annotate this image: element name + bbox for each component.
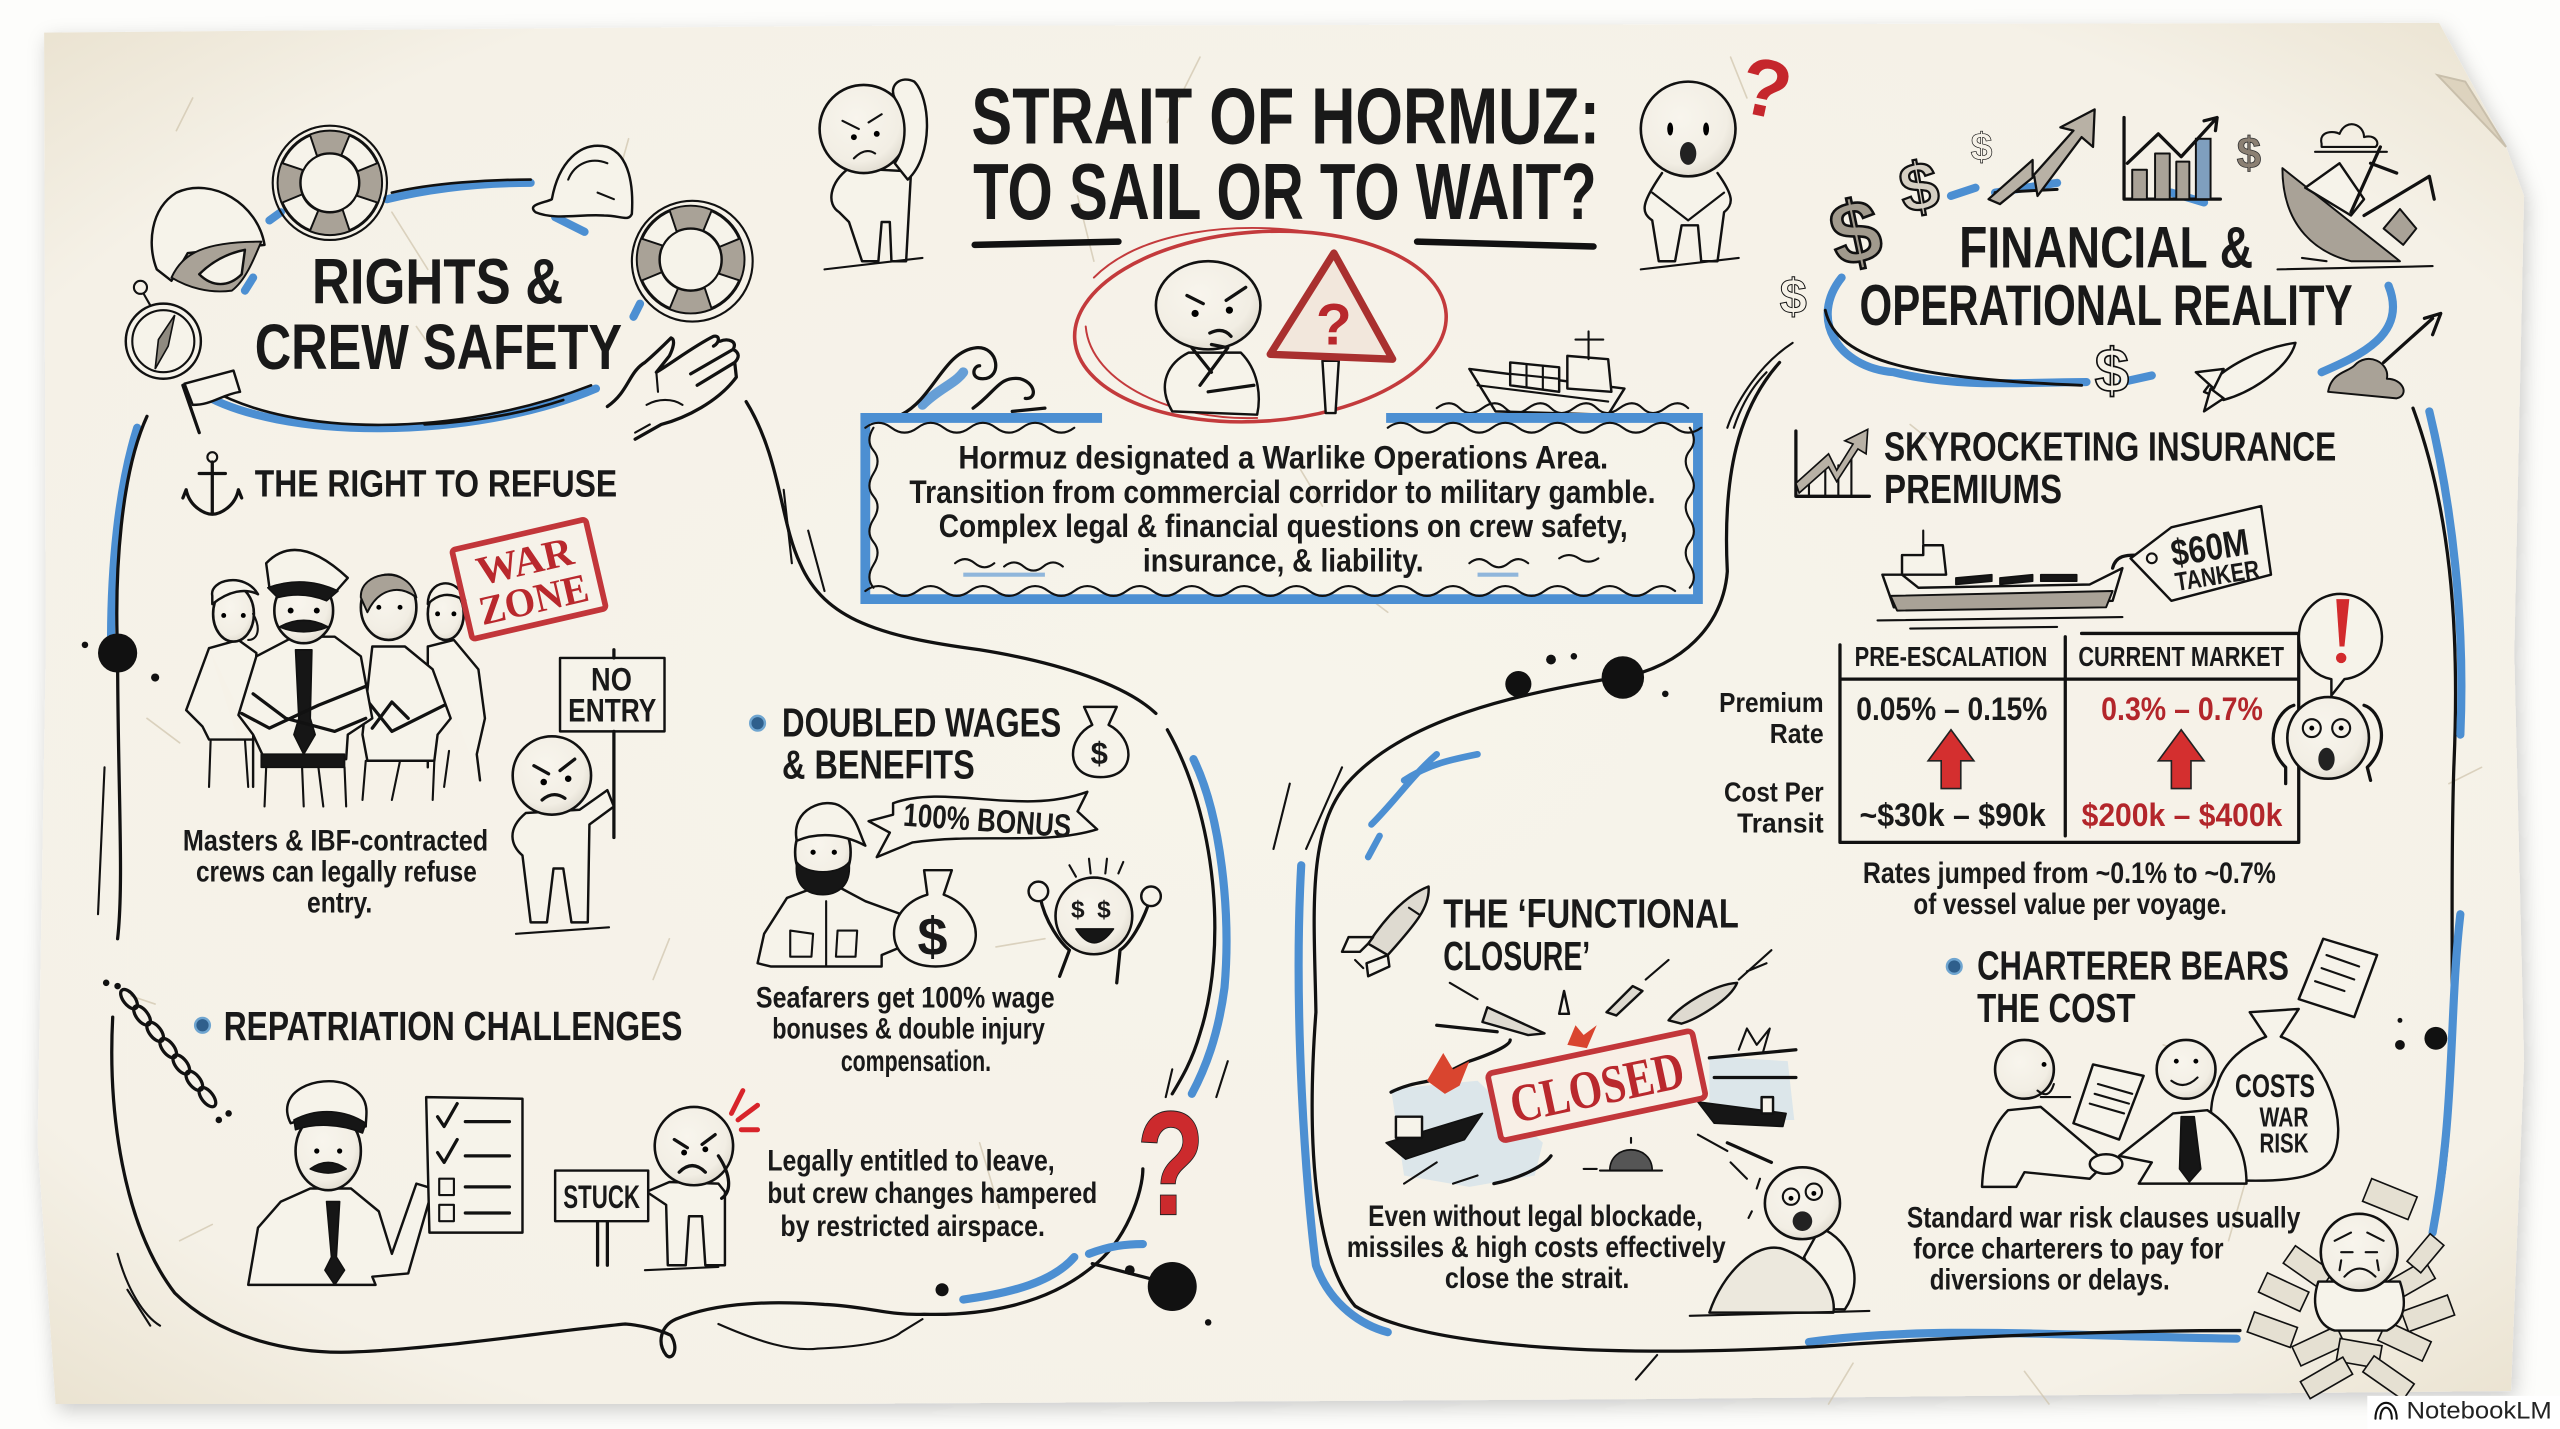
illustration: closed strait with missiles and ships [1386, 950, 1796, 1187]
icon: sinking ship [2278, 147, 2434, 269]
title: STRAIT OF HORMUZ: [971, 72, 1600, 161]
icon: red question mark: ? [1732, 39, 1799, 139]
icon: dollar signs: $ [1894, 146, 1944, 228]
illustration: seafarer with money bag [758, 803, 976, 967]
icon: broken chain [105, 981, 230, 1122]
table: insurance premiums: Cost Per [1724, 777, 1824, 808]
illustration: tanker with price tag: $60M [2168, 520, 2252, 574]
sign: no entry with angry person: NO [591, 661, 632, 698]
icon: dollar signs: $ [1821, 179, 1890, 286]
subheading: doubled wages and benefits: DOUBLED WAGES [782, 699, 1061, 745]
illustration: handshake and war risk bag: COSTS [2235, 1067, 2315, 1104]
flow lines: left panel outline [98, 402, 1228, 1357]
table: insurance premiums: Transit [1737, 808, 1824, 839]
icon: scroll [2299, 939, 2377, 1017]
banner: 100% bonus [869, 792, 1097, 857]
subheading: repatriation challenges: REPATRIATION CHALLENGES [224, 1003, 682, 1049]
banner: 100% bonus: 100% BONUS [902, 796, 1072, 844]
panel: intro box: insurance, & liability. [1143, 541, 1424, 578]
icon: life ring 1 [257, 111, 402, 255]
table: insurance premiums: PRE-ESCALATION [1855, 641, 2047, 672]
icon: rocket [2196, 343, 2295, 411]
subheading: doubled wages and benefits [750, 699, 1061, 788]
text: entitled to leave: by restricted airspace. [780, 1210, 1045, 1243]
text: masters can refuse: entry. [307, 887, 372, 920]
subheading: skyrocketing insurance premiums: PREMIUMS [1884, 466, 2062, 512]
table: insurance premiums: Rate [1770, 718, 1824, 749]
icon: large red question mark: ? [1136, 1082, 1205, 1247]
illustration: stuck sign and worried person: STUCK [563, 1178, 640, 1215]
illustration: handshake and war risk bag: RISK [2260, 1128, 2309, 1159]
text: wage bonuses: bonuses & double injury [772, 1012, 1045, 1045]
text: masters can refuse [183, 825, 488, 920]
icon: cloud [2315, 124, 2387, 152]
title: TO SAIL OR TO WAIT? [973, 147, 1597, 236]
table: insurance premiums: 0.05% – 0.15% [1856, 690, 2047, 727]
stamp: war zone: WAR [472, 528, 578, 594]
figure: thinking person with warning sign: ? [1316, 292, 1352, 357]
heading: rights and crew safety: RIGHTS & [312, 247, 563, 318]
subheading: charterer bears the cost [1947, 943, 2289, 1031]
illustration: officer with checklist [248, 1081, 522, 1285]
text: rates jumped: of vessel value per voyage. [1913, 888, 2227, 921]
stamp: war zone [452, 519, 606, 639]
icon: flag [183, 371, 240, 433]
text: masters can refuse: crews can legally refuse [196, 856, 477, 889]
text: standard war risk clauses: force charterers to pay for [1913, 1233, 2224, 1266]
subheading: doubled wages and benefits: & BENEFITS [782, 742, 975, 788]
icon: dollar signs: $ [1780, 270, 1807, 324]
icon: small money bag [1073, 707, 1128, 777]
subheading: charterer bears the cost: CHARTERER BEARS [1977, 943, 2289, 989]
ink blots [82, 633, 2447, 1326]
heading: financial and operational reality: OPERATIONAL REALITY [1860, 274, 2353, 338]
subheading: the functional closure [1342, 886, 1739, 979]
illustration: panicked person [2273, 697, 2381, 784]
text: even without legal blockade: close the strait. [1445, 1262, 1629, 1295]
table: insurance premiums [1719, 633, 2299, 842]
icon: explosion cloud [2328, 313, 2441, 398]
sign: no entry with angry person [512, 650, 665, 934]
stamp: war zone: ZONE [474, 565, 593, 634]
watermark: NotebookLM [2367, 1396, 2560, 1429]
table: insurance premiums: $200k – $400k [2082, 796, 2283, 833]
panel: intro box: Hormuz designated a Warlike Operations Area. [958, 439, 1608, 476]
illustration: handshake and war risk bag [1982, 1009, 2338, 1187]
panel: rights and crew safety [105, 111, 1205, 1285]
stamp: closed: CLOSED [1505, 1040, 1690, 1135]
subheading: the right to refuse [183, 452, 617, 514]
heading: rights and crew safety: CREW SAFETY [255, 312, 622, 383]
panel: intro box: Transition from commercial corridor to military gamble. [909, 473, 1655, 510]
icon: dollar signs [1780, 126, 2261, 406]
watermark: NotebookLM: NotebookLM [2406, 1398, 2552, 1425]
figure: puzzled person left [820, 80, 927, 269]
heading: rights and crew safety [193, 180, 640, 428]
text: masters can refuse: Masters & IBF-contracted [183, 825, 488, 858]
text: even without legal blockade [1347, 1200, 1726, 1295]
illustration: tanker with price tag [1878, 506, 2271, 629]
subheading: skyrocketing insurance premiums: SKYROCKETING INSURANCE [1884, 423, 2336, 469]
text: entitled to leave: but crew changes hampered [767, 1177, 1097, 1210]
table: insurance premiums: 0.3% – 0.7% [2101, 690, 2263, 727]
text: wage bonuses: Seafarers get 100% wage [756, 981, 1055, 1014]
icon: life ring 2 [616, 185, 765, 334]
text: standard war risk clauses: Standard war risk clauses usually [1907, 1202, 2301, 1235]
subheading: the functional closure: THE ‘FUNCTIONAL [1443, 890, 1739, 936]
icon: dollar signs: $ [1971, 126, 1993, 169]
illustration: tanker with price tag: TANKER [2173, 554, 2262, 597]
icon: rising arrow [1989, 109, 2095, 204]
panel: intro box: Complex legal & financial questions on crew safety, [939, 507, 1628, 544]
illustration: despairing person with boulder [1690, 1167, 1869, 1316]
subheading: skyrocketing insurance premiums [1796, 423, 2336, 512]
subheading: the right to refuse: THE RIGHT TO REFUSE [255, 462, 617, 504]
icon: wave [901, 348, 1045, 415]
icon: open hand [607, 336, 738, 439]
illustration: happy person with dollar eyes [1029, 859, 1161, 983]
heading: financial and operational reality [1825, 183, 2393, 385]
text: standard war risk clauses [1907, 1202, 2301, 1297]
text: rates jumped: Rates jumped from ~0.1% to ~0.7% [1863, 857, 2276, 890]
illustration: stuck sign and worried person [555, 1091, 758, 1270]
panel: intro box [865, 418, 1701, 599]
flow lines: right panel outline [1273, 343, 2461, 1380]
subheading: charterer bears the cost: THE COST [1977, 985, 2136, 1031]
icon: ship [1437, 331, 1688, 415]
illustration: happy person with dollar eyes: $ [1071, 897, 1085, 924]
illustration: happy person with dollar eyes: $ [1097, 897, 1111, 924]
heading: financial and operational reality: FINANCIAL & [1959, 216, 2253, 281]
icon: small money bag: $ [1091, 736, 1108, 771]
table: insurance premiums: ~$30k – $90k [1860, 796, 2046, 833]
text: rates jumped [1863, 857, 2276, 921]
illustration: crying person on pile of money [2247, 1179, 2455, 1400]
text: wage bonuses [756, 981, 1055, 1078]
subheading: the functional closure: CLOSURE’ [1443, 933, 1590, 979]
figure: thinking person with warning sign [1068, 219, 1453, 434]
callout: exclamation bubble [2299, 594, 2382, 695]
text: entitled to leave [767, 1145, 1097, 1243]
figure: surprised person right [1641, 82, 1739, 269]
icon: military helmet [152, 188, 265, 291]
table: insurance premiums: Premium [1719, 687, 1824, 718]
icon: bar chart [2124, 118, 2220, 199]
text: even without legal blockade: missiles & high costs effectively [1347, 1231, 1726, 1264]
table: insurance premiums: CURRENT MARKET [2078, 641, 2284, 672]
text: even without legal blockade: Even without legal blockade, [1368, 1200, 1703, 1233]
panel: financial and operational reality [1342, 109, 2455, 1400]
text: wage bonuses: compensation. [841, 1045, 991, 1078]
title [971, 72, 1600, 247]
illustration: seafarer with money bag: $ [918, 907, 948, 967]
sign: no entry with angry person: ENTRY [568, 692, 657, 729]
illustration: crew with arms crossed [186, 550, 485, 806]
icon: compass [126, 281, 201, 379]
icon: dollar signs: $ [2237, 129, 2261, 178]
icon: dollar signs: $ [2095, 337, 2129, 406]
text: standard war risk clauses: diversions or delays. [1930, 1264, 2170, 1297]
icon: hard hat [533, 146, 632, 218]
text: entitled to leave: Legally entitled to leave, [767, 1145, 1055, 1178]
illustration: handshake and war risk bag: WAR [2260, 1101, 2309, 1132]
